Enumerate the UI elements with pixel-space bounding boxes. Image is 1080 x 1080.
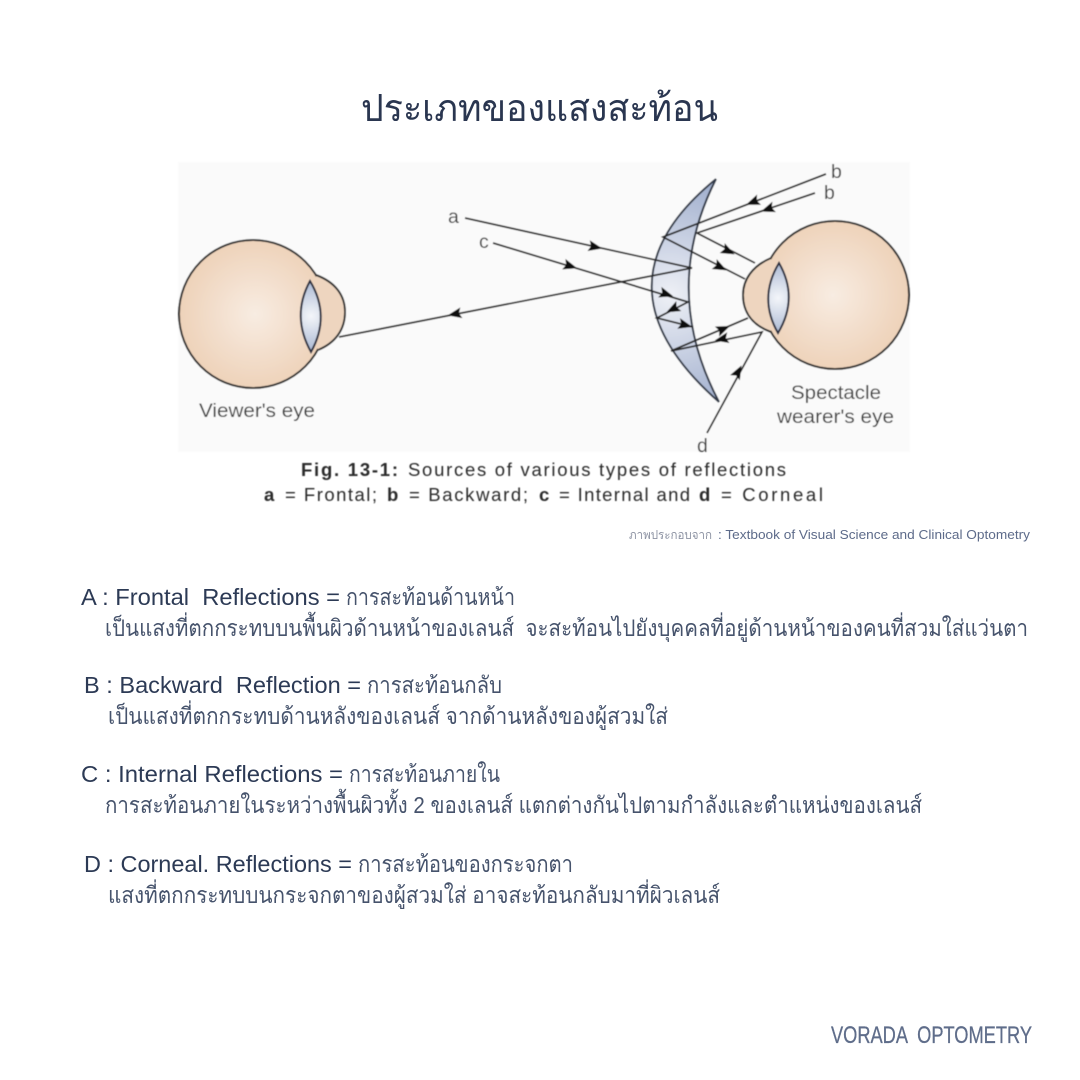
icon: viewer's eye [179, 240, 345, 388]
text block: C internal reflections: การสะท้อนภายใน [349, 761, 500, 787]
text block: C internal reflections: การสะท้อนภายในระหว่างพื้นผิวทั้ง 2 ของเลนส์ แตกต่างกันไปตามกำลังและตำแหน่งของเลนส์ [105, 789, 922, 818]
arrowheads [447, 195, 776, 380]
text block: D corneal reflections: D : Corneal. Reflections = [84, 851, 352, 877]
figure caption: = Corneal [721, 484, 823, 505]
text block: C internal reflections: C : Internal Reflections = [81, 761, 343, 787]
label: viewer's eye: Viewer's eye [199, 400, 315, 422]
text block: B backward reflection: เป็นแสงที่ตกกระทบด้านหลังของเลนส์ จากด้านหลังของผู้สวมใส่ [108, 700, 668, 730]
text block: A frontal reflections [81, 584, 1028, 642]
figure caption: b [387, 484, 398, 505]
icon: spectacle wearer's eye [743, 221, 909, 369]
image source credit: ภาพประกอบจาก [629, 528, 712, 542]
text block: B backward reflection: การสะท้อนกลับ [367, 672, 502, 698]
figure caption: = Internal and [559, 484, 690, 505]
figure caption: a [264, 484, 275, 505]
icon: spectacle lens [652, 179, 719, 402]
figure caption: = Frontal; [285, 484, 377, 505]
ray labels: b [824, 182, 835, 204]
text block: B backward reflection [84, 672, 668, 730]
text block: D corneal reflections [84, 851, 720, 909]
ray labels: b [831, 161, 842, 183]
label: spectacle wearer's eye: Spectacle [791, 382, 881, 404]
label: spectacle wearer's eye: wearer's eye [776, 406, 894, 428]
figure caption: c [539, 484, 549, 505]
title: ประเภทของแสงสะท้อน [361, 88, 718, 130]
figure caption: Sources of various types of reflections [408, 459, 786, 480]
text block: B backward reflection: B : Backward Reflection = [84, 672, 361, 698]
ray paths [339, 174, 826, 433]
text block: D corneal reflections: การสะท้อนของกระจกตา [358, 851, 573, 877]
figure caption: d [699, 484, 710, 505]
ray labels: c [479, 231, 489, 253]
figure caption [264, 459, 823, 505]
ray labels: a [448, 206, 459, 228]
text block: D corneal reflections: แสงที่ตกกระทบบนกระจกตาของผู้สวมใส่ อาจสะท้อนกลับมาที่ผิวเลนส์ [108, 879, 720, 909]
image source credit: : Textbook of Visual Science and Clinical Optometry [718, 527, 1031, 542]
figure caption: = Backward; [409, 484, 528, 505]
text block: C internal reflections [81, 761, 922, 818]
text block: A frontal reflections: การสะท้อนด้านหน้า [346, 584, 515, 610]
diagram: sources of reflections [178, 161, 910, 457]
figure caption: Fig. 13-1: [301, 459, 398, 480]
ray labels [448, 161, 842, 457]
ray labels: d [697, 435, 708, 457]
text block: A frontal reflections: A : Frontal Reflections = [81, 584, 340, 610]
label: spectacle wearer's eye [776, 382, 894, 428]
